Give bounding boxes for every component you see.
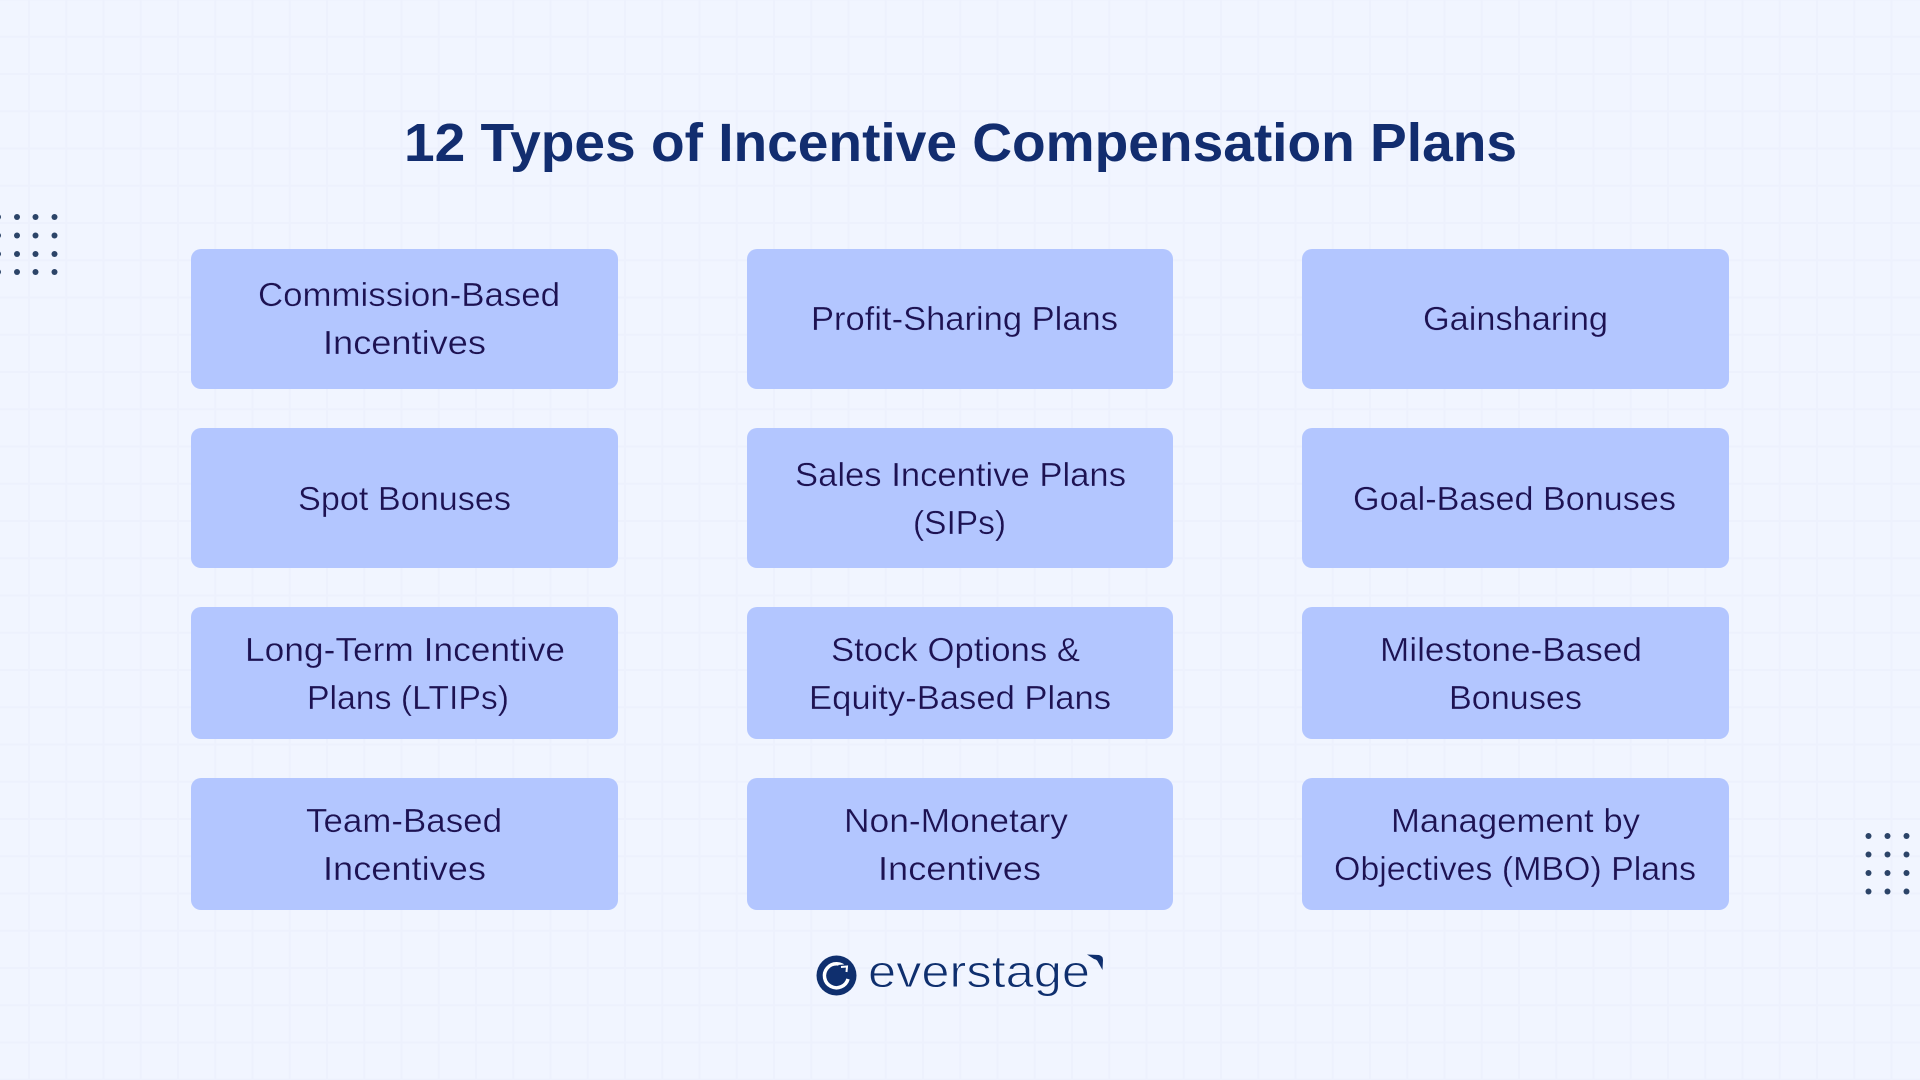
- card: Goal-Based Bonuses: [1302, 428, 1729, 568]
- card: Commission-Based Incentives: Commission-Based: [258, 277, 560, 314]
- card: Sales Incentive Plans (SIPs): Sales Incentive Plans: [795, 457, 1126, 494]
- card: Commission-Based Incentives: Incentives: [323, 325, 486, 362]
- card: Profit-Sharing Plans: [747, 249, 1173, 389]
- icon: everstage mark: [816, 956, 856, 996]
- card: Milestone-Based Bonuses: Bonuses: [1449, 680, 1582, 717]
- card: Gainsharing: [1302, 249, 1729, 389]
- card: Long-Term Incentive Plans (LTIPs): Plans (LTIPs): [307, 680, 509, 717]
- card: Sales Incentive Plans (SIPs): (SIPs): [913, 505, 1006, 542]
- card: Management by Objectives (MBO) Plans: Management by: [1391, 803, 1640, 840]
- title: 12 Types of Incentive Compensation Plans: [404, 113, 1517, 173]
- logo: everstage: [816, 946, 1103, 997]
- card: Management by Objectives (MBO) Plans: Objectives (MBO) Plans: [1334, 851, 1696, 888]
- card: Milestone-Based Bonuses: [1302, 607, 1729, 739]
- card: Stock Options & Equity-Based Plans: Equity-Based Plans: [809, 680, 1111, 717]
- card: Profit-Sharing Plans: Profit-Sharing Plans: [811, 301, 1118, 338]
- card: Team-Based Incentives: [191, 778, 618, 910]
- card: Long-Term Incentive Plans (LTIPs): [191, 607, 618, 739]
- card: Long-Term Incentive Plans (LTIPs): Long-Term Incentive: [245, 632, 565, 669]
- card: Sales Incentive Plans (SIPs): [747, 428, 1173, 568]
- card: Team-Based Incentives: Team-Based: [306, 803, 502, 840]
- card: Team-Based Incentives: Incentives: [323, 851, 486, 888]
- card: Non-Monetary Incentives: Non-Monetary: [844, 803, 1068, 840]
- card: Gainsharing: Gainsharing: [1423, 301, 1608, 338]
- card: Management by Objectives (MBO) Plans: [1302, 778, 1729, 910]
- card: Spot Bonuses: Spot Bonuses: [298, 481, 511, 518]
- card: Non-Monetary Incentives: [747, 778, 1173, 910]
- card: Goal-Based Bonuses: Goal-Based Bonuses: [1353, 481, 1676, 518]
- card: Spot Bonuses: [191, 428, 618, 568]
- card: Commission-Based Incentives: [191, 249, 618, 389]
- card: Milestone-Based Bonuses: Milestone-Based: [1380, 632, 1642, 669]
- wordmark: everstage: [868, 946, 1090, 997]
- icon: corner accent: [1087, 954, 1103, 970]
- card: Stock Options & Equity-Based Plans: [747, 607, 1173, 739]
- card: Non-Monetary Incentives: Incentives: [878, 851, 1041, 888]
- dot pattern: bottom right: [1866, 833, 1910, 894]
- card: Stock Options & Equity-Based Plans: Stock Options &: [831, 632, 1080, 669]
- dot pattern: top left: [0, 214, 58, 275]
